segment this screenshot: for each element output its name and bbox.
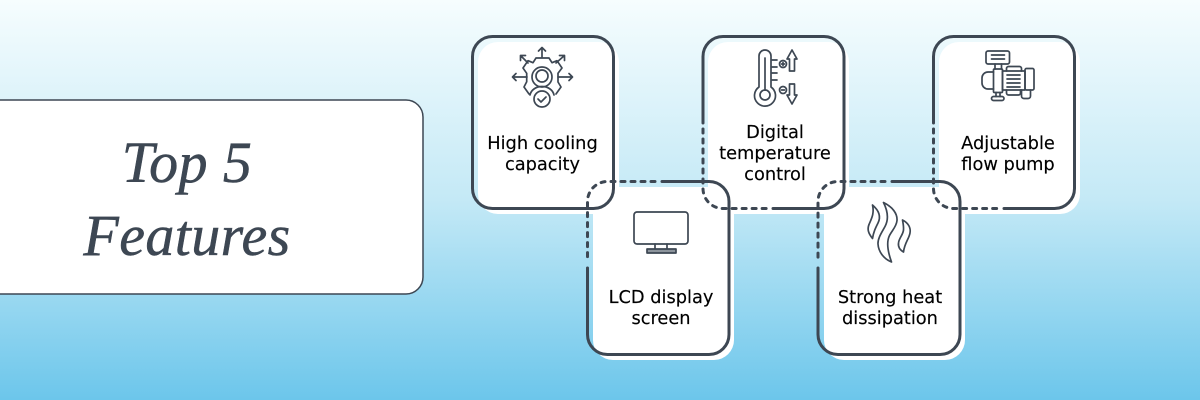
panel: title [0,100,423,294]
label: LCD display screen: LCD display [609,287,713,308]
label: LCD display screen: screen [631,308,691,329]
label: Strong heat dissipation: Strong heat [838,287,942,308]
label: Adjustable flow pump: flow pump [961,154,1055,175]
card: adjustable flow pump [934,36,1074,208]
icon: gear with person and arrows [512,48,572,107]
card: digital temperature control [703,36,844,208]
label: High cooling capacity: capacity [505,154,580,175]
icon: thermometer with up and down arrows [755,50,797,106]
label: High cooling capacity: High cooling [487,133,598,154]
label: Adjustable flow pump: Adjustable [961,133,1055,154]
icon: heat waves [868,202,910,262]
label: Strong heat dissipation: dissipation [842,308,938,329]
panel: white card backings [478,42,1080,360]
label: Digital temperature control: Digital [746,122,804,143]
icon: monitor [634,212,688,253]
label: Digital temperature control: temperature [719,143,831,164]
card: LCD display screen [588,182,729,354]
icon: pump [982,51,1034,100]
card: high cooling capacity [472,36,614,208]
heading: Top 5 Features: Top 5 [122,130,252,195]
heading: Top 5 Features: Features [82,203,291,268]
card: strong heat dissipation [818,182,960,354]
label: Digital temperature control: control [744,164,806,185]
